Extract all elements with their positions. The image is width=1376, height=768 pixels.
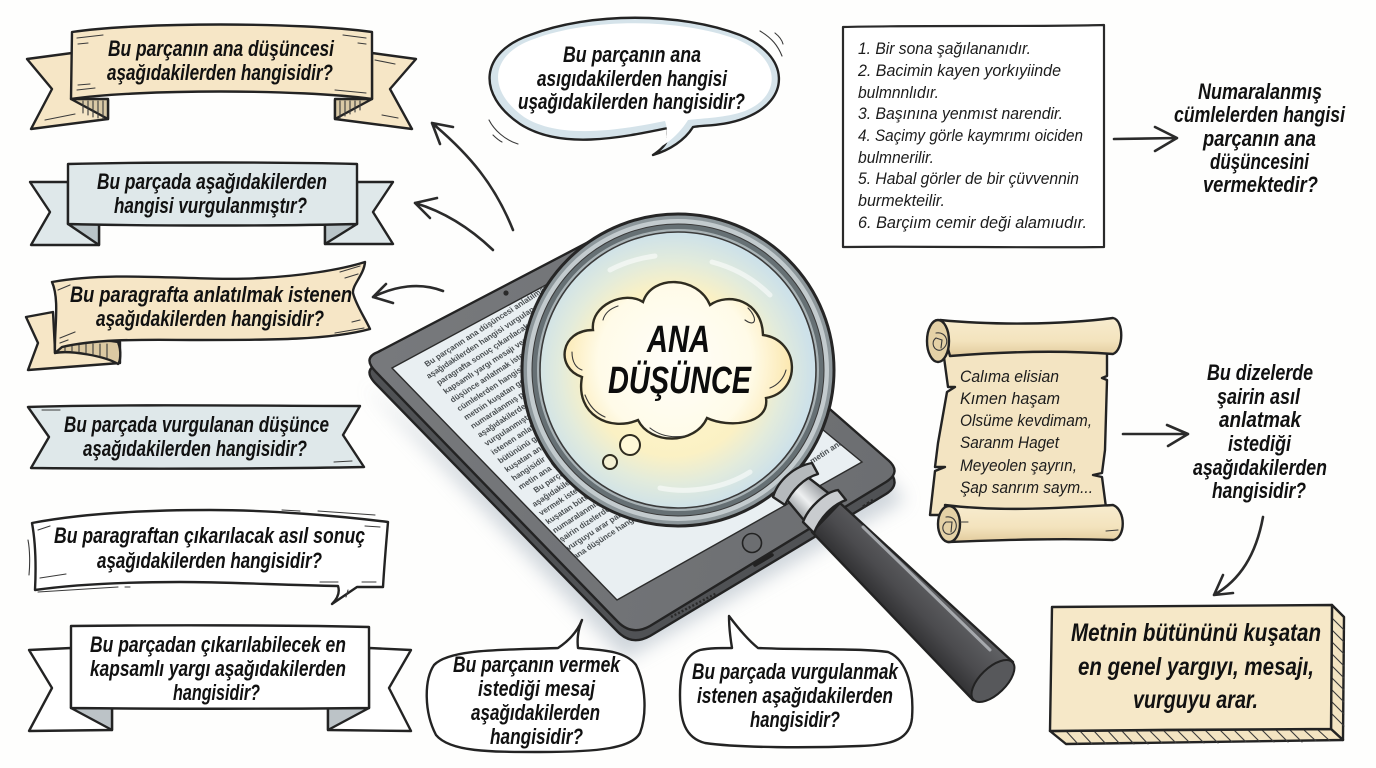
speech bubble: bottom right xyxy=(680,616,912,747)
magnifier xyxy=(522,214,1021,709)
question: numaralanmış cümleler: parçanın ana xyxy=(1202,126,1316,151)
question: numaralanmış cümleler: düşüncesini xyxy=(1210,149,1310,174)
tablet xyxy=(366,232,905,660)
question: şairin dizeleri xyxy=(1193,360,1327,503)
banner text: hangisi vurgulanmıştır? xyxy=(114,193,307,218)
camera xyxy=(503,290,509,296)
bubble text xyxy=(453,652,621,749)
tablet text: vurgulanmıştır paragraf düşüncesini en xyxy=(482,360,614,448)
bubble text: asıgıdakilerden hangisi xyxy=(537,66,728,91)
bubble text xyxy=(692,659,899,732)
tablet text: aşağıdakilerden hangisi istenen mesajı xyxy=(530,422,660,509)
tablet text: aşağıdakilerden hangisi vurgulanan metin xyxy=(424,287,564,381)
lens glass xyxy=(540,232,816,508)
arrow: scroll to question xyxy=(1123,425,1188,446)
verse: Calıma elisian xyxy=(960,367,1059,386)
banner text xyxy=(64,412,329,461)
top roll xyxy=(940,318,1121,356)
banner text: aşağıdakilerden hangisidir? xyxy=(83,436,307,461)
numbered list: 4. Saçimy görle kaymrımı oiciden xyxy=(858,126,1083,145)
tablet text: aşağıdakilerden yargı mesaj hangisidir xyxy=(476,353,605,439)
tablet text: kuşatan bütününü cümleler hangisidir xyxy=(544,441,671,526)
arrow: to third banner xyxy=(373,284,443,303)
banner text xyxy=(97,169,327,218)
lens highlights xyxy=(610,256,770,490)
tablet face xyxy=(369,232,895,630)
banner text: aşağıdakilerden hangisidir? xyxy=(96,306,324,331)
arrow: question to conclusion xyxy=(1214,517,1263,595)
question: şairin dizeleri: şairin asıl xyxy=(1217,384,1301,409)
charging slot xyxy=(755,555,772,565)
scroll body xyxy=(930,350,1107,515)
panel: scroll with verse xyxy=(927,318,1123,542)
question: şairin dizeleri: istediği xyxy=(1228,431,1292,456)
numbered list: 6. Barçiım cemir deği alamıudır. xyxy=(858,213,1087,232)
tablet text: kuşatan ana düşünce aşağıdakilerden xyxy=(503,389,629,474)
tablet text: kapsamlı yargı mesajı vermektedir asıl xyxy=(441,310,569,396)
verse: Kımen haşam xyxy=(960,389,1060,408)
bubble text: aşağıdakilerden xyxy=(471,700,600,725)
banner text xyxy=(107,36,335,85)
numbered list: bulmnerilir. xyxy=(858,148,934,167)
tablet text: bütününü genel asıl parçanın yargıyı xyxy=(496,383,618,465)
bubble text: uşağıdakilerden hangisidir? xyxy=(518,89,745,114)
question: numaralanmış cümleler: vermektedir? xyxy=(1203,172,1318,197)
lens rim xyxy=(522,214,834,526)
banner text xyxy=(70,282,352,331)
arrow: to second banner xyxy=(415,198,493,250)
banner: vurgulanmıştır xyxy=(30,162,393,245)
tablet text xyxy=(418,270,845,563)
question: şairin dizeleri: aşağıdakilerden xyxy=(1193,455,1327,480)
banner: anlatılmak istenen xyxy=(26,262,370,370)
central title xyxy=(608,319,752,402)
banner text xyxy=(90,632,346,705)
tablet side xyxy=(369,244,895,640)
home button xyxy=(742,534,762,552)
panel: numbered sentences xyxy=(843,25,1104,247)
tablet text: numaralanmış parçada çıkarılabilecek xyxy=(469,345,596,430)
banner text: Bu parçada vurgulanan düşünce xyxy=(64,412,329,437)
banner text xyxy=(54,523,365,573)
bubble text: Bu parçanın ana xyxy=(563,42,701,67)
verse xyxy=(960,367,1093,497)
bubble text: Bu parçada vurgulanmak xyxy=(692,659,899,684)
banner: kapsamlı yargı xyxy=(29,625,411,731)
question: şairin dizeleri: anlatmak xyxy=(1219,407,1303,432)
tablet text: numaralanmış düşüncesini vermektedir xyxy=(551,446,683,535)
banner text: kapsamlı yargı aşağıdakilerden xyxy=(90,656,346,681)
tablet screen xyxy=(392,252,862,600)
panel: conclusion box xyxy=(1050,605,1344,744)
conclusion text: vurguyu arar. xyxy=(1133,686,1258,714)
tablet text: ana düşünce hangisidir çıkarılabilecek xyxy=(571,475,700,561)
numbered list: 1. Bir sona şağılananıdır. xyxy=(858,39,1031,58)
tablet text: Bu parçada vurgulanan düşünce anlatmak xyxy=(532,400,673,495)
tablet text: düşünce anlatmak istenen parçanın ana xyxy=(448,315,581,404)
conclusion text: en genel yargıyı, mesajı, xyxy=(1078,653,1314,681)
banner: vurgulanan düşünce xyxy=(28,405,364,469)
tablet text: vermek istediği parçanın genel yargı xyxy=(537,436,658,517)
central title: ANA xyxy=(646,319,710,361)
tablet text: cümlelerden hangisi şairin dizelerde xyxy=(455,331,577,413)
arrow: to first banner xyxy=(432,123,513,230)
conclusion text: Metnin bütününü kuşatan xyxy=(1071,619,1321,647)
banner: asıl sonuç xyxy=(28,510,388,604)
thought cloud xyxy=(565,282,792,469)
bubble text: hangisidir? xyxy=(490,724,583,749)
tablet text: metin ana xyxy=(808,437,845,466)
central title: DÜŞÜNCE xyxy=(608,359,752,402)
banner text: Bu parçanın ana düşüncesi xyxy=(108,36,335,61)
side buttons xyxy=(863,500,873,507)
verse: Saranm Haget xyxy=(960,433,1060,452)
numbered list: burmekteilir. xyxy=(858,191,945,210)
tablet text: vurguyu arar paragrafta sonuç kapsamlı xyxy=(564,463,698,552)
verse: Şap sanrım saym... xyxy=(960,478,1093,497)
banner text: Bu paragrafta anlatılmak istenen xyxy=(70,282,352,307)
question: numaralanmış cümleler: Numaralanmış xyxy=(1198,79,1322,104)
speech bubble: top xyxy=(489,18,783,155)
bubble text xyxy=(518,42,745,114)
banner: ana düşüncesi xyxy=(27,24,416,129)
conclusion text xyxy=(1071,619,1321,714)
numbered list xyxy=(857,39,1087,232)
speaker grille xyxy=(671,593,717,617)
tablet shadow xyxy=(366,385,905,660)
banner text: hangisidir? xyxy=(173,680,260,705)
bubble text: Bu parçanın vermek xyxy=(453,652,621,677)
question: numaralanmış cümleler xyxy=(1174,79,1346,197)
numbered list: 3. Başınına yenmıst narendir. xyxy=(858,104,1063,123)
tablet text: istenen anlatılmak sonuç mesajı metin xyxy=(489,371,617,457)
speech bubble: bottom left xyxy=(427,620,645,752)
right hatched side xyxy=(1331,605,1344,740)
question: şairin dizeleri: hangisidir? xyxy=(1212,478,1306,503)
tablet text: şairin dizelerde asıl anlatmak metin xyxy=(557,464,676,543)
bubble text: istenen aşağıdakilerden xyxy=(697,683,893,708)
banner text: Bu parçadan çıkarılabilecek en xyxy=(90,632,346,657)
arrow: numbered list to question xyxy=(1114,127,1177,151)
numbered list: bulmnnlıdır. xyxy=(858,83,939,102)
tablet text: metin ana bu xyxy=(516,458,564,491)
handle xyxy=(773,463,1021,709)
numbered list: 5. Habal görler de bir çüvvennin xyxy=(858,169,1079,188)
bubble text: hangisidir? xyxy=(750,707,840,732)
question: şairin dizeleri: Bu dizelerde xyxy=(1207,360,1313,385)
numbered list: 2. Bacimin kayen yorkıyiinde xyxy=(857,61,1061,80)
bubble text: istediği mesaj xyxy=(478,676,596,701)
tablet text: Bu parçanın ana düşüncesi anlatılmak xyxy=(423,283,551,369)
tablet text: hangisidir paragraftan çıkarılacak xyxy=(510,406,623,483)
banner text: Bu paragraftan çıkarılacak asıl sonuç xyxy=(54,523,365,548)
bottom hatched side xyxy=(1050,729,1343,744)
banner text: aşağıdakilerden hangisidir? xyxy=(97,548,322,573)
banner text: aşağıdakilerden hangisidir? xyxy=(107,60,333,85)
verse: Meyeolen şayrın, xyxy=(960,456,1077,475)
tablet text: metnin kuşatan genel vurguyu arar bu xyxy=(462,336,589,422)
banner text: Bu parçada aşağıdakilerden xyxy=(97,169,327,194)
tablet text: paragrafta sonuç çıkarılacak bütününü xyxy=(435,301,564,387)
bottom roll xyxy=(945,505,1123,542)
verse: Olsüme kevdimam, xyxy=(960,411,1092,430)
